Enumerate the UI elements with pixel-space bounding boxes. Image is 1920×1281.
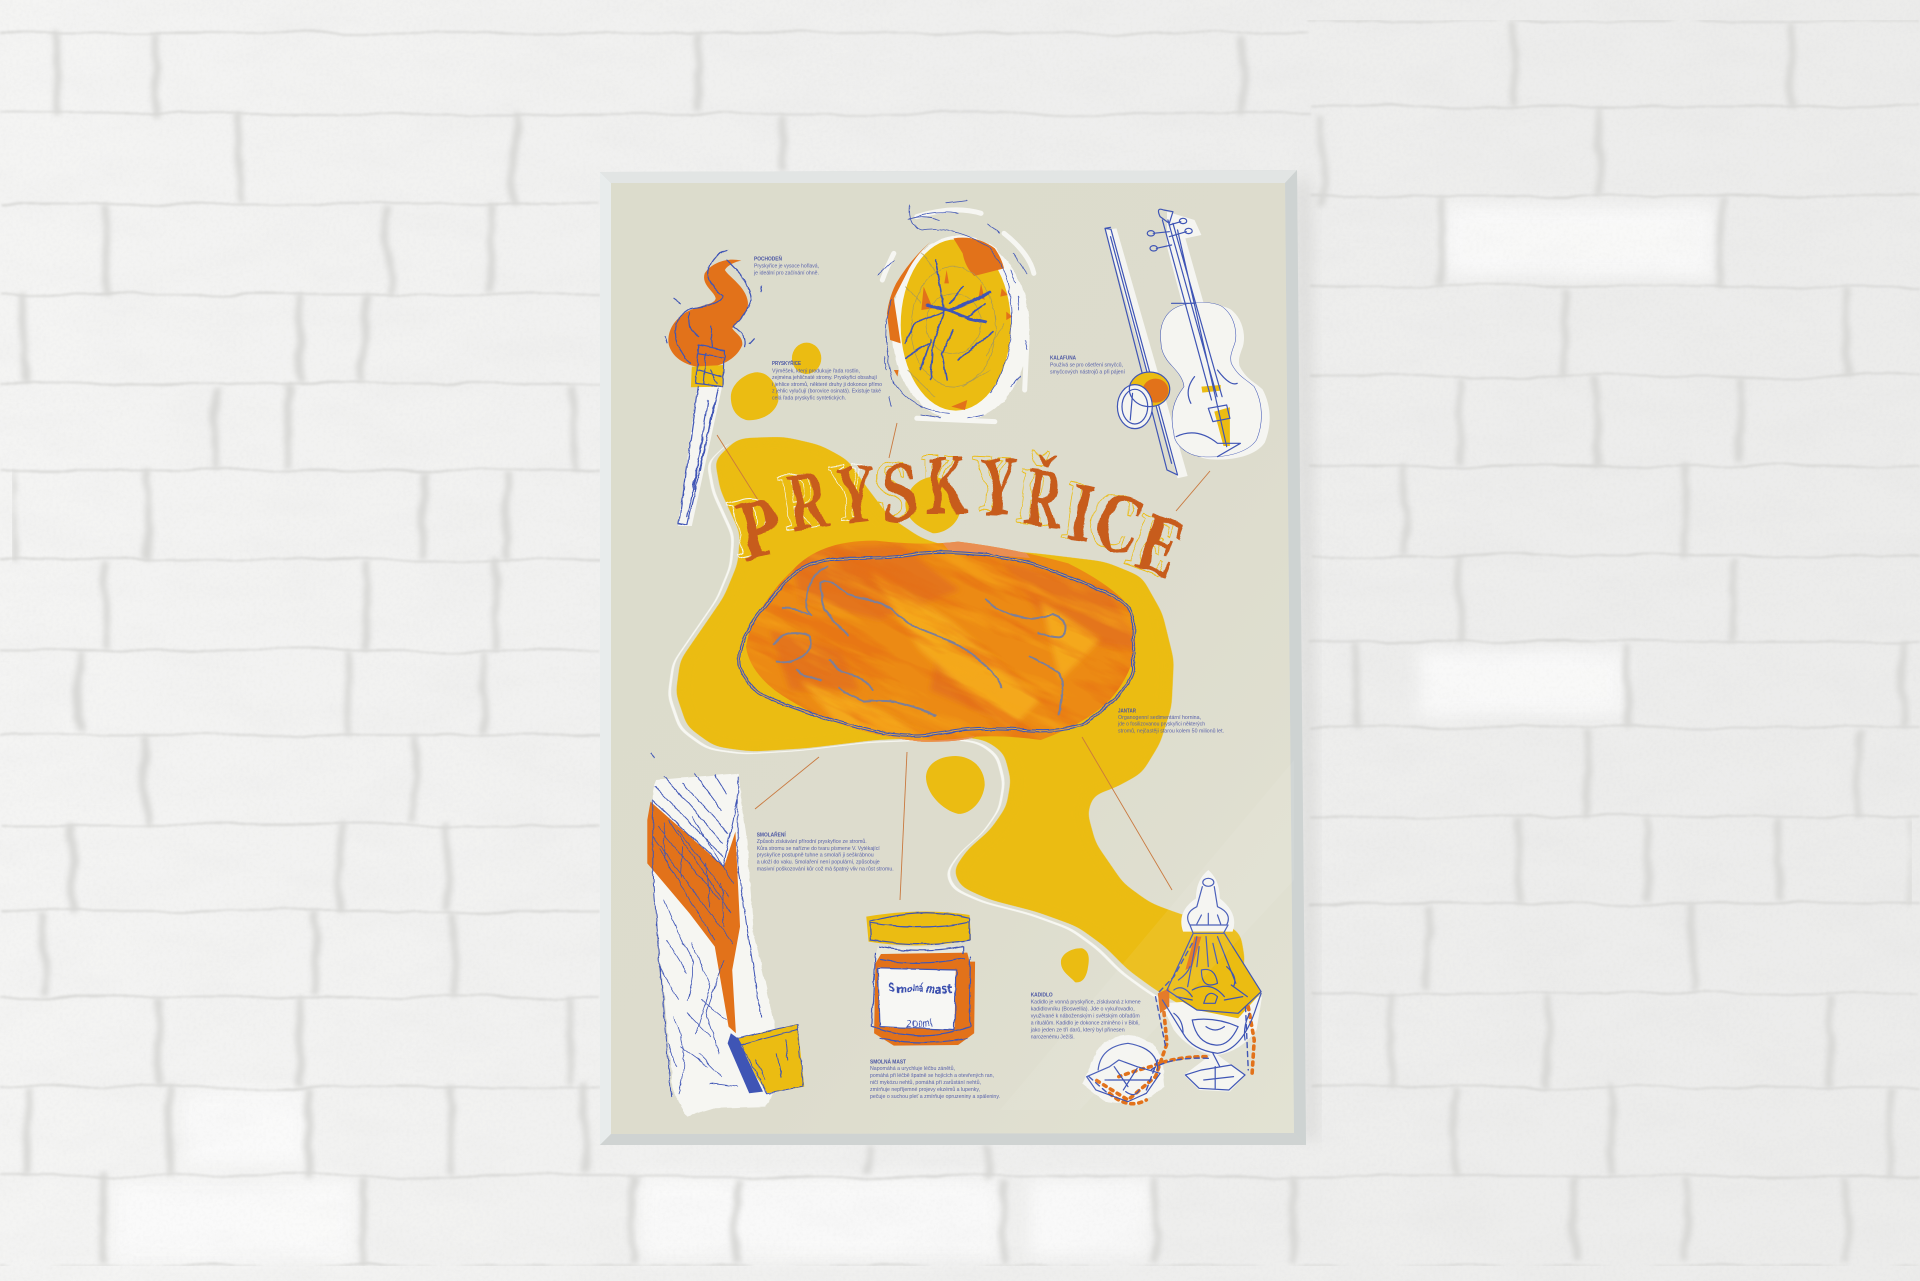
text: Smolná mast [870,1058,1000,1100]
text: Smolná mast: zmírňuje nepříjemné projevy ekzémů a lupenky, [870,1086,980,1093]
icon: torch [665,250,762,526]
sketch lines around the slice [878,201,1027,418]
title letters: S [879,446,920,540]
text: Kadidlo: využívané k náboženským i světským obřadům [1031,1013,1140,1020]
text: Smolná mast: pečuje o suchou pleť a zmírňuje opruzeniny a spáleniny. [870,1094,1000,1100]
title outlines [721,436,1186,594]
text: Pryskyřice: celá řada pryskyřic syntetických. [772,395,846,401]
icon: violin, bow and rosin [1105,209,1270,478]
text: Smolná mast: SMOLNÁ MAST [870,1058,907,1065]
title letters: Ř [1020,451,1069,547]
icon: tapped tree trunk with resin [647,753,804,1117]
text: Pryskyřice: zejména jehličnaté stromy. Pryskyřici obsahují [772,375,877,381]
resin pot [738,1024,804,1093]
jar label text: Smolná mast [890,980,952,996]
text: Pochodeň: POCHODEŇ [754,255,782,263]
title letters: C [1086,472,1152,573]
text: Pochodeň [753,255,819,276]
white halo [892,236,1029,421]
orange resin cut [647,802,740,1033]
title letters: Y [833,447,880,543]
title outlines: Ř [1013,449,1062,545]
text: Pryskyřice: Výměšek, který produkuje řada rostlin, [772,368,860,374]
text: Smolaření: Kůra stromu se nařízne do tvaru písmene V. Vytékající [757,845,880,852]
title letters: K [927,438,967,531]
text: Kalafuna: smyčcových nástrojů a při pájení [1050,368,1125,375]
leader lines [717,423,1210,900]
icon: cut wood slice with resin [878,201,1034,422]
title letters: I [1062,464,1102,560]
title letters: R [783,454,834,551]
violin tailpiece and bridge [1201,385,1230,446]
title letters [730,438,1195,596]
text: Pryskyřice: i jehlice stromů, některé druhy ji dokonce přímo [772,381,882,388]
jar label text: 200ml [906,1020,934,1030]
title outlines: Y [825,445,872,541]
rosin [1129,372,1170,407]
text: Kadidlo: kadidlovníku (Boswellia). Jde o vykuřovadlo, [1031,1007,1135,1013]
bow [1105,227,1178,475]
text: Smolaření: masivní poškozování kůr což má špatný vliv na růst stromu. [757,865,894,872]
poster paper [611,183,1294,1134]
icon: incense censer [1082,870,1262,1105]
title letters: P [730,479,790,578]
title outlines: Y [969,438,1012,532]
text: Jantar: stromů, nejčastěji starou kolem 50 milionů let. [1118,727,1224,734]
amber contour lines and inclusions [739,552,1134,736]
yellow resin blob with white contour [667,437,1245,1020]
yellow lid [866,912,971,945]
text: Kadidlo [1030,993,1141,1041]
amber stone [746,540,1136,742]
white halos [1181,870,1234,932]
text: Jantar: Organogenní sedimentární hornina, [1118,715,1201,721]
text: Pochodeň: Pryskyřice je vysoce hořlavá, [754,264,819,270]
text: Jantar: jde o fosilizovanou pryskyřici některých [1117,722,1205,728]
title outlines: P [721,477,781,576]
title: PRYSKYŘICE [721,436,1195,596]
wood rings [905,253,1004,397]
small yellow drops [731,343,1089,982]
text: Kadidlo: KADIDLO [1031,993,1053,999]
ointment [874,953,975,1046]
white trunk [653,773,777,1117]
torch flame [668,260,748,367]
white label [878,968,956,1030]
torch handle [678,387,722,526]
text: Smolná mast: Napomáhá a urychluje léčbu zánětů, [870,1065,955,1072]
text: Smolaření: Způsob získávání přírodní pryskyřice ze stromů. [757,838,867,845]
text: Smolná mast: pomáhá při léčbě špatně se hojících a otevřených ran, [870,1073,994,1079]
jar label text [890,980,952,1030]
title outlines: R [774,454,825,551]
text: Kadidlo: narozenému Ježíši. [1031,1035,1075,1041]
blue ornament linework [1087,878,1261,1102]
poster frame [600,170,1306,1145]
title letters: Y [977,440,1020,534]
title outlines: E [1117,493,1186,594]
jar glass [873,947,970,967]
text: Kalafuna: KALAFUNA [1050,356,1076,362]
poster artwork [647,200,1270,1116]
text: Smolaření: pryskyřice postupně tuhne a smolaři ji seškrábnou [757,853,874,859]
blue cracks [905,260,993,380]
title outlines: K [920,436,960,529]
text: Kadidlo: Kadidlo je vonná pryskyřice, získávaná z kmene [1031,1000,1141,1006]
text: Jantar [1117,708,1224,734]
text: Smolaření: a uloží do vaku. Smolaření není populární, způsobuje [757,859,880,866]
white halos [1105,228,1188,478]
orange resin patches [887,238,1012,410]
icon: jar of resin ointment [866,912,975,1046]
title outlines: I [1055,462,1095,558]
yellow slice [901,239,1011,411]
text: Pryskyřice: z jehlic vylučují (borovice osinatá). Existuje také [772,389,881,395]
text: Kalafuna [1050,356,1125,375]
text: Smolaření: SMOLAŘENÍ [757,830,786,838]
title outlines: S [872,444,913,538]
text: Pryskyřice: PRYSKYŘICE [772,359,801,367]
text: Kadidlo: a rituálům. Kadidlo je dokonce zmíněno i v Bibli, [1031,1020,1140,1027]
text: Smolaření [757,830,894,872]
yellow lantern body [1165,932,1261,1018]
text: Jantar: JANTAR [1118,708,1136,714]
text: Pryskyřice [772,359,882,401]
violin lines [1147,209,1261,457]
orange chains [1096,997,1254,1104]
text: Smolná mast: ničí mykózu nehtů, pomáhá při zarůstání nehtů, [870,1079,981,1086]
glass glare [1000,760,1294,1110]
text: Kadidlo: jako jeden ze tří darů, který byl přinesen [1030,1027,1125,1034]
title outlines: C [1078,470,1144,571]
text: Kalafuna: Používá se pro ošetření smyčců, [1050,362,1123,369]
text: Pochodeň: je ideální pro začínání ohně. [753,270,819,276]
title letters: E [1126,495,1195,596]
